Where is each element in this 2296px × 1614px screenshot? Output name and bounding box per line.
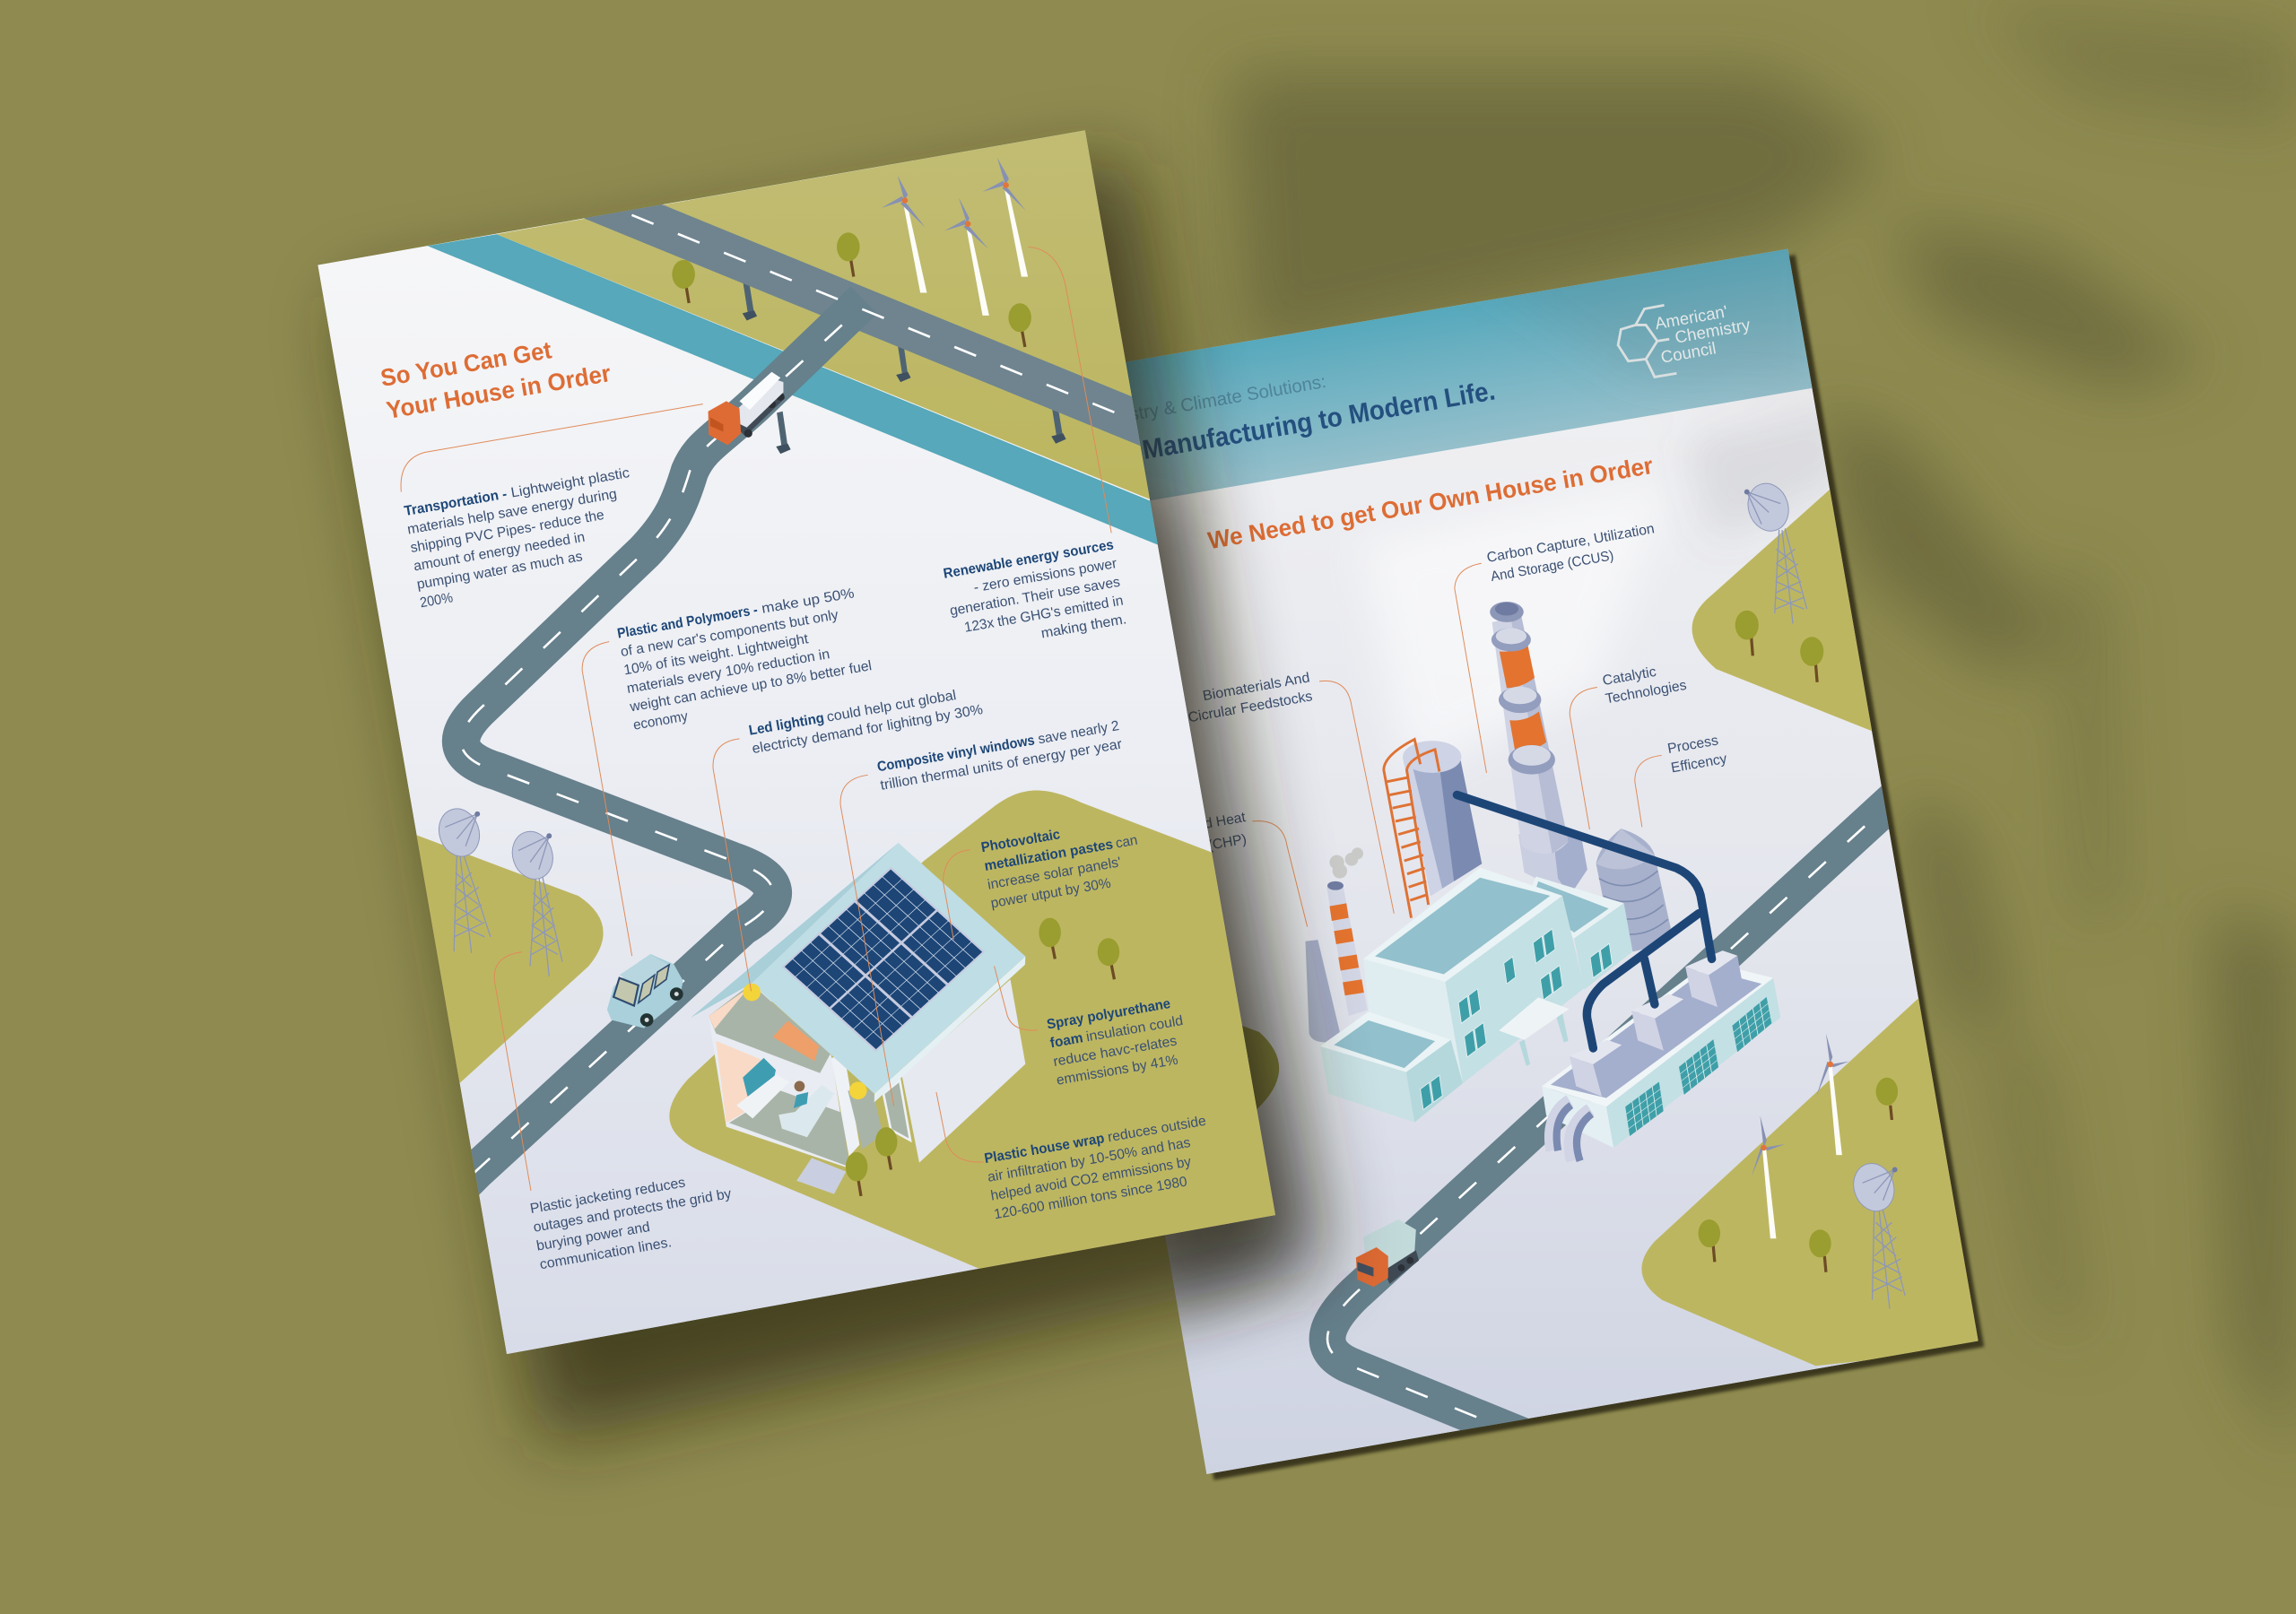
text: plastic jacketing: outages and protects the grid by [532,1186,733,1236]
text: plastic house wrap [983,1114,1217,1222]
text: composite vinyl windows: Composite vinyl windows [876,733,1036,775]
text: photovoltaic: increase solar panels' [987,855,1122,893]
text: transportation [403,465,647,611]
solar panels [783,868,984,1051]
front sheet cast shadow [344,161,1326,1442]
icon: turbines top [882,158,1028,316]
text: photovoltaic: Photovoltaic [980,827,1062,855]
icon: car [607,954,683,1028]
roof [691,843,899,1018]
icon: column tower [1403,741,1482,896]
text: plastic and polymers: make up 50% [761,586,856,617]
icon: grey chimney [1306,940,1340,1042]
green field top [496,130,1171,508]
solar-style window grids [1625,1082,1664,1136]
text: spray polyurethane: Spray polyurethane [1046,996,1172,1033]
text: plastic house wrap: 120-600 million tons since 1980 [993,1174,1188,1222]
text: plastic and polymers [615,585,876,733]
text: photovoltaic: can [1115,833,1139,852]
text: plastic and polymers: materials every 10% reduction in [626,646,831,697]
house interior [709,1016,849,1168]
text: plastic house wrap: air infiltration by 10-50% and has [987,1135,1192,1185]
callout: CCUS [1455,521,1656,773]
header band [1126,249,1812,500]
icon: dish tower lower [1848,1158,1905,1309]
icon: trees, right sheet [1699,611,1898,1272]
logo [1618,301,1752,377]
factory: rear building [1523,876,1632,990]
title: So You Can Get [378,336,553,392]
lamps [743,984,761,1001]
callout: process: Efficency [1670,751,1728,776]
icon: turbines [1752,1034,1849,1238]
panel: front sheet, house [317,130,1289,1354]
callout: CHP [1135,810,1308,926]
text: spray polyurethane: foam [1049,1030,1084,1051]
logo text: Council [1659,338,1718,367]
text: transportation: 200% [419,590,454,611]
icon: ladder [1384,739,1439,918]
text: renewable energy: 123x the GHG's emitted in [963,594,1125,636]
factory: low building [1320,1011,1463,1123]
text: spray polyurethane: emmissions by 41% [1056,1053,1179,1089]
right sheet shadow [1025,255,1984,1480]
callout: biomaterials: Biomaterials And [1202,670,1311,704]
text: transportation: amount of energy needed in [413,530,587,574]
callout: process [1635,733,1728,827]
text: plastic jacketing: burying power and [535,1219,651,1254]
front sheet shadow on right sheet [1113,512,1289,1317]
icon: small truck [1356,1219,1419,1287]
text: led lighting: Led lighting [748,710,825,739]
text: composite vinyl windows: trillion thermal units of energy per year [879,737,1123,794]
paper lighting under artwork [1382,249,1830,746]
logo text: American' [1654,301,1729,333]
panel: right sheet, factory [1126,249,1979,1474]
shaded blob behind front sheet [1201,1011,1279,1157]
title: Your House in Order [385,360,613,424]
text: led lighting: electricty demand for lighitng by 30% [751,702,984,757]
text: plastic house wrap: reduces outside [1107,1114,1207,1145]
text: plastic jacketing [529,1167,739,1272]
factory: lower building [1542,950,1780,1148]
icon: trees top [672,232,1031,347]
road [1327,791,1903,1448]
icon: silo [1596,829,1671,951]
icon: dish tower upper [1742,478,1807,624]
green field left [396,827,604,1127]
text: spray polyurethane [1046,994,1191,1089]
text: led lighting: could help cut global [826,688,957,725]
callout: catalytic: Catalytic [1601,664,1657,689]
callout: catalytic [1570,664,1688,829]
text: plastic and polymers: economy [632,709,689,733]
text: renewable energy: Renewable energy sources [943,537,1115,582]
icon: tall stack [1490,602,1587,896]
text: renewable energy: generation. Their use saves [949,575,1121,619]
text: photovoltaic: power utput by 30% [989,876,1112,911]
icon: striped chimney with smoke [1326,847,1368,1016]
icon: pipe truck [709,372,785,445]
text: composite vinyl windows: save nearly 2 [1037,718,1120,747]
text: spray polyurethane: reduce havc-relates [1052,1034,1178,1070]
subtitle: Chemistry & Climate Solutions: [1076,372,1327,434]
icon: dish towers front [433,803,562,976]
text: plastic and polymers: of a new car's components but only [620,607,839,660]
text: renewable energy: - zero emissions power [972,556,1118,595]
green field lower right [1641,995,1991,1366]
callout lines [401,247,1111,1191]
callout: CHP: And Power (CHP) [1135,832,1248,866]
text: plastic jacketing: communication lines. [539,1235,673,1272]
icon: house [691,843,1119,1196]
text: renewable energy: making them. [1039,612,1127,641]
steps [796,1158,846,1194]
green field lower right [669,791,1289,1271]
factory: windows [1421,929,1613,1110]
text: plastic and polymers: Plastic and Polymoers - [616,603,759,642]
text: transportation: Transportation - [403,487,508,519]
factory: canopy [1499,997,1570,1066]
teal river band [428,234,1171,551]
roof boxes [1570,950,1744,1097]
callout: CHP: Combined Heat [1148,810,1248,842]
house trees [846,918,1119,1196]
header title: Manufacturing to Modern Life. [1140,376,1498,465]
text: plastic house wrap: Plastic house wrap [983,1131,1106,1167]
text: plastic jacketing: Plastic jacketing reduces [529,1175,687,1217]
text: transportation: pumping water as much as [415,549,584,593]
callout: biomaterials: Cicrular Feedstocks [1187,689,1314,725]
right sheet paper [1126,249,1979,1474]
text: transportation: Lightweight plastic [509,465,631,501]
text: plastic and polymers: weight can achieve up to 8% better fuel [628,658,873,716]
navy pipes [1457,795,1712,1048]
elevated road and route [439,196,1157,1208]
factory: main building [1363,867,1585,1083]
text: plastic house wrap: helped avoid CO2 emmissions by [989,1154,1192,1204]
callout: CCUS: Carbon Capture, Utilization [1486,521,1656,566]
text: transportation: materials help save energy during [406,487,618,538]
callout: process: Process [1666,733,1719,757]
text: photovoltaic: metallization pastes [983,837,1115,874]
front sheet paper [317,130,1275,1354]
text: plastic and polymers: 10% of its weight. Lightweight [622,631,810,678]
callout: biomaterials [1187,670,1394,914]
logo text: Chemistry [1674,315,1752,347]
exhaust pipes [1551,1101,1592,1161]
text: renewable energy [943,537,1128,656]
text: photovoltaic [980,814,1145,911]
callout: catalytic: Technologies [1605,678,1688,707]
callout: CCUS: And Storage (CCUS) [1490,548,1615,585]
section title: We Need to get Our Own House in Order [1206,452,1656,554]
text: transportation: shipping PVC Pipes- reduce the [409,508,605,556]
green field upper right [1692,490,1873,732]
text: spray polyurethane: insulation could [1085,1013,1184,1045]
bridge pillars [743,277,1066,454]
logo text [1654,301,1752,367]
